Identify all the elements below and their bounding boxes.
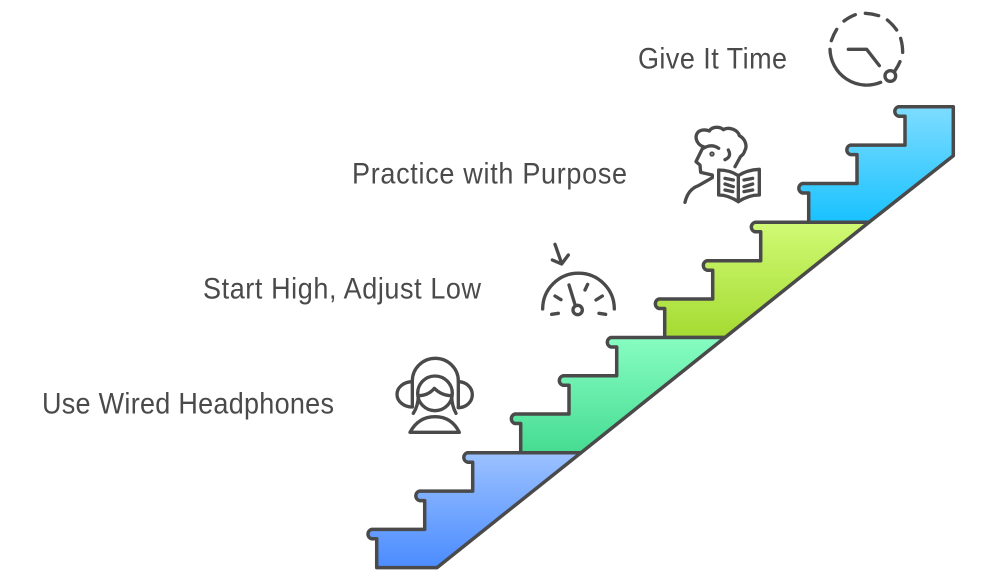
stair segment: cyan top — [799, 107, 953, 222]
icon: clock — [830, 13, 903, 85]
icon: person reading — [685, 127, 759, 202]
label: Give It Time: Give It Time — [638, 42, 787, 76]
icon: speed gauge — [543, 244, 614, 315]
stair segment: blue bottom — [368, 453, 581, 568]
label: Use Wired Headphones: Use Wired Headphones — [42, 387, 334, 421]
stair segment: green — [511, 338, 725, 453]
label: Practice with Purpose: Practice with Purpose — [352, 157, 627, 191]
label: Start High, Adjust Low: Start High, Adjust Low — [203, 272, 481, 306]
icon: person with headphones — [397, 358, 472, 432]
stair segment: lime — [655, 222, 869, 338]
